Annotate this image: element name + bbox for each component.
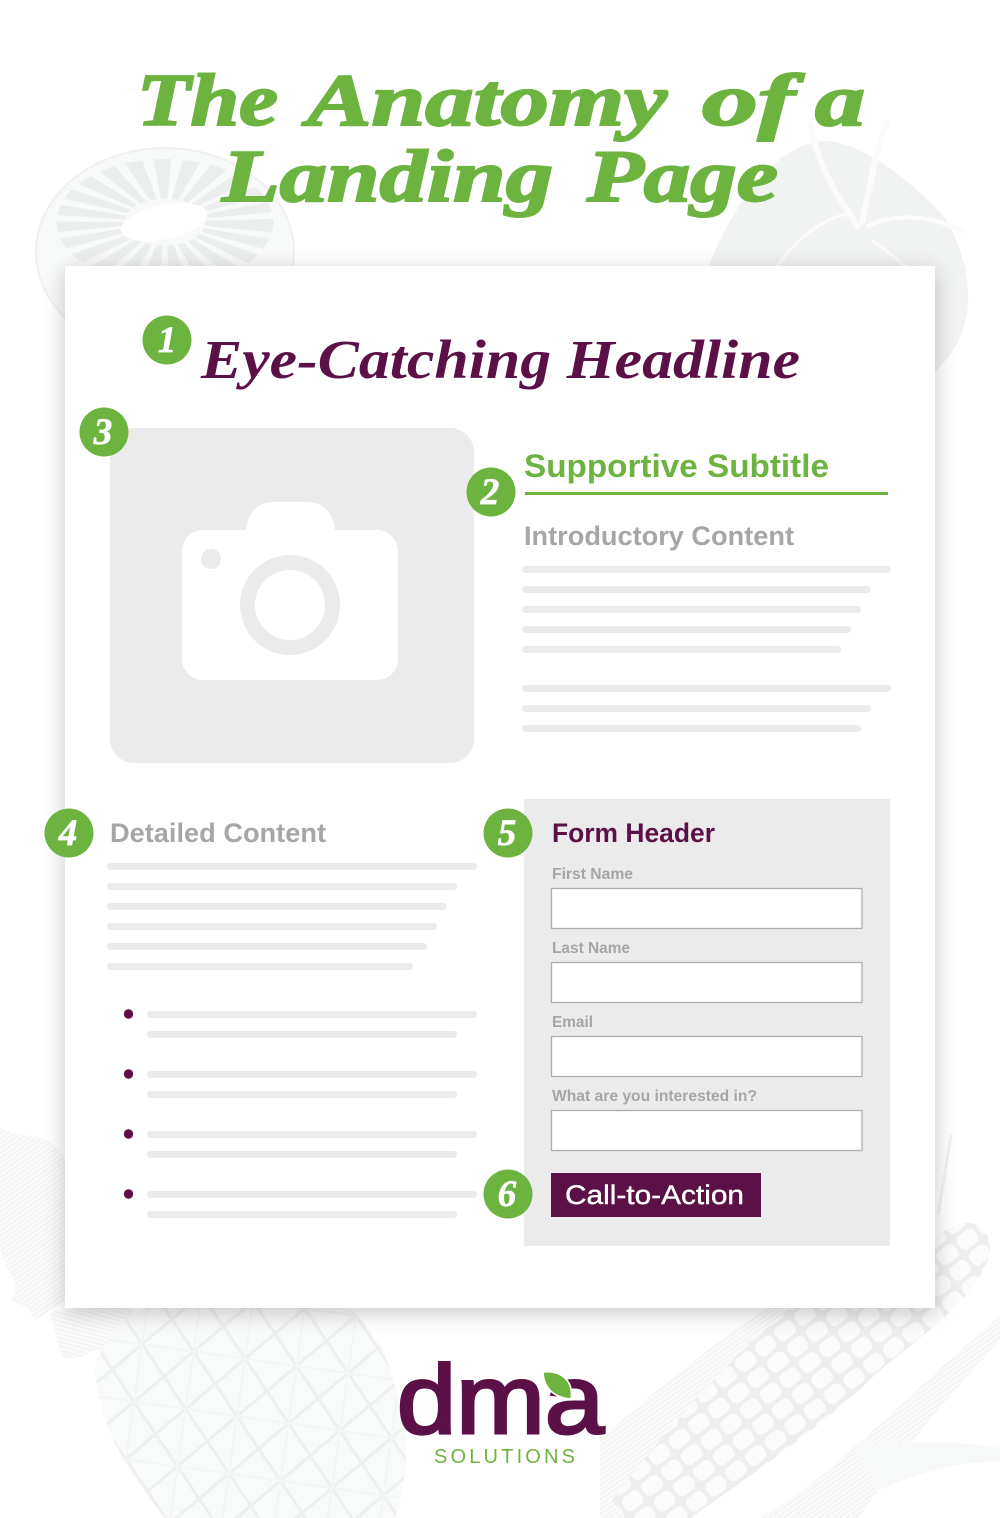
illustration: pineapple [0,1128,406,1518]
illustration: corn [600,1135,1000,1518]
headline: Eye-Catching Headline [200,329,800,390]
title [137,60,865,218]
detailed content heading: Detailed Content [110,818,326,848]
badge 3: 3 [93,412,112,453]
input: email [552,1036,862,1076]
subtitle rule [525,492,888,495]
image placeholder with camera icon [110,428,474,763]
input: last name [552,962,862,1002]
detailed placeholder lines [107,863,477,970]
badge 1 [142,316,192,364]
badge 1: 1 [158,320,176,361]
panel: form [524,799,890,1246]
label: interest: What are you interested in? [552,1088,757,1105]
label: last name: Last Name [552,940,630,957]
title line 1 [137,60,865,142]
badge 4 [44,808,94,858]
badge 2 [466,468,516,516]
title line 2: Page [586,136,778,218]
badge 6: 6 [498,1174,517,1215]
title line 1: of [702,60,805,142]
badge 3 [80,408,128,456]
introductory placeholder lines [522,566,891,732]
input: interest [552,1110,862,1150]
input: first name [552,888,862,928]
title line 1: Anatomy [302,60,668,142]
illustration: tomato [700,122,968,376]
title line 2: Landing [221,136,553,218]
badge 2: 2 [480,472,499,513]
badge 5 [484,808,532,858]
subtitle: Supportive Subtitle [524,448,829,484]
logo leaf [543,1372,571,1399]
badge 4: 4 [58,813,77,854]
introductory content heading: Introductory Content [524,521,794,551]
title line 2 [221,136,778,218]
logo [397,1345,604,1468]
badge 6 [484,1170,532,1218]
badge 5: 5 [498,813,516,854]
title line 1: The [137,60,278,142]
illustration: kiwi [36,148,294,356]
logo tagline: SOLUTIONS [434,1446,575,1468]
title line 1: a [815,60,865,142]
label: first name: First Name [552,866,633,883]
label: email: Email [552,1014,593,1031]
bullet list [124,1009,477,1218]
call-to-action button: Call-to-Action [565,1180,744,1210]
panel: landing page card [65,266,935,1308]
call-to-action button [551,1173,761,1217]
form header: Form Header [552,818,715,848]
logo wordmark: dma [397,1345,604,1454]
